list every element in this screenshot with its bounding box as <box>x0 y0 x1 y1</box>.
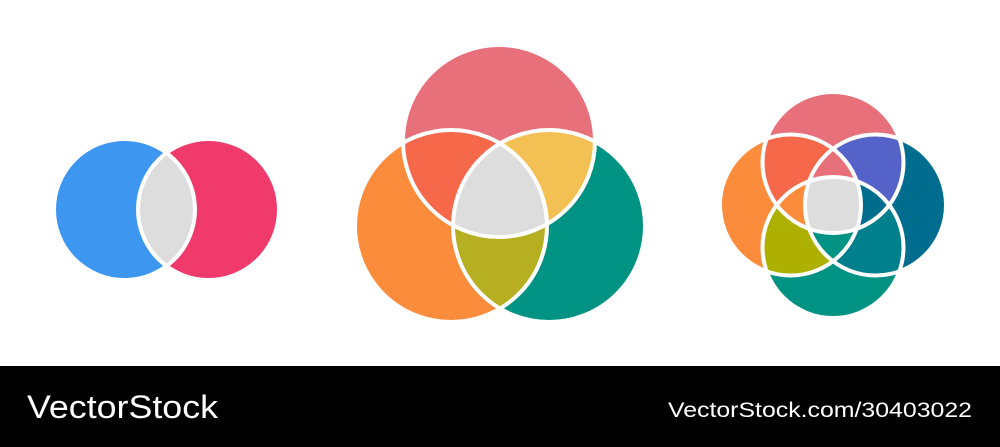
diagram: two-circle venn <box>54 139 279 280</box>
diagram: three-circle venn <box>355 45 645 322</box>
footer bar <box>0 366 1000 447</box>
footer url text: VectorStock.com/30403022 <box>668 399 972 422</box>
footer logo text: VectorStock <box>27 389 219 425</box>
diagram: four-circle venn <box>722 94 944 316</box>
